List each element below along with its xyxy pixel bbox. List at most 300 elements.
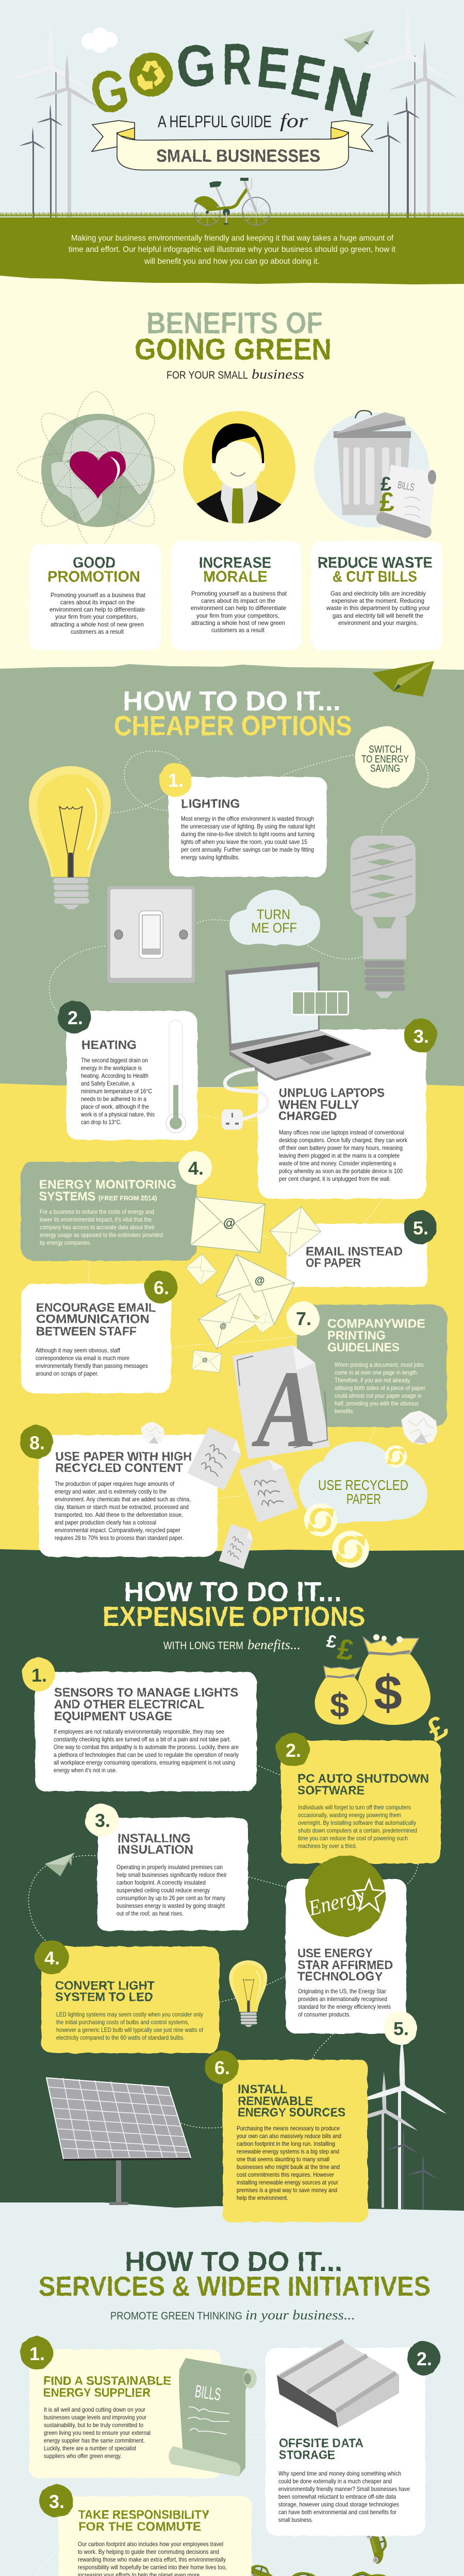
text: renewable energy systems is a big step and: [237, 2148, 339, 2155]
number 2: [58, 1001, 91, 1033]
text: cost commitments this requires. However: [237, 2171, 334, 2178]
number 4: 4.: [188, 1158, 204, 1179]
title: ENERGY SOURCES: [238, 2106, 345, 2120]
text: customers as a result: [211, 626, 265, 634]
icon: paper plane: [343, 30, 374, 53]
number 5: [404, 1210, 437, 1244]
text: [80, 1057, 155, 1126]
icon: heart: [70, 451, 126, 499]
icon: server block: [277, 2340, 399, 2428]
icon: green cars: [245, 2526, 392, 2576]
callout: switch to energy saving: SWITCH: [369, 744, 402, 755]
number 4: [179, 1151, 212, 1185]
heading: how to do it services and wider initiatives: [39, 2246, 430, 2302]
title: GUIDELINES: [327, 1341, 400, 1354]
number 3: [404, 1019, 437, 1053]
title: OFFSITE DATA: [279, 2436, 363, 2450]
subtitle: a helpful guide for: A HELPFUL GUIDE: [158, 112, 272, 131]
callout: use recycled paper: PAPER: [346, 1491, 381, 1507]
text: [326, 590, 430, 626]
icon: recycle symbols: [304, 1445, 407, 1568]
text: desktop computers. Once fully charged, they can work: [279, 1137, 408, 1144]
text: Therefore, if you are not already,: [335, 1377, 411, 1384]
icon: bills scroll: [169, 2358, 257, 2477]
title: go green: E: [254, 34, 292, 103]
icon: cable and plug: [222, 1069, 268, 1130]
text: expensive at the moment. Reducing: [332, 597, 424, 604]
text: environment can help to differentiate: [191, 604, 286, 612]
text: all workplace energy consuming operations, ensuring equipment is not using: [54, 1759, 235, 1766]
illustration: smiling businessman: [183, 411, 295, 529]
icon: small light bulb: [229, 1960, 267, 2027]
title: SOFTWARE: [297, 1784, 364, 1798]
text: help the environment.: [237, 2194, 288, 2201]
text: responsibility will hopefully be carried into their home lives too,: [78, 2564, 227, 2571]
panel: convert light system to led: [35, 1940, 219, 2053]
text: Why spend time and money doing something which: [278, 2470, 401, 2477]
text: and Safety Executive, a: [81, 1080, 135, 1087]
text: It is all well and good cutting down on your: [44, 2406, 145, 2413]
title: [327, 1317, 425, 1354]
connector lines expensive: [28, 1765, 418, 2128]
title: OF PAPER: [306, 1256, 361, 1270]
icon: document with letter A: A: [251, 1347, 317, 1470]
title: COMPANYWIDE: [327, 1317, 425, 1331]
icon: energy star logo: Energy: [306, 1884, 367, 1921]
icon: energy star logo: [305, 1855, 386, 1937]
text: occasionally, wasting energy powering them: [298, 1811, 401, 1819]
text: [44, 2406, 151, 2460]
hero illustration: [0, 7, 464, 284]
title: [55, 1979, 155, 2004]
panel: good promotion: [29, 544, 161, 650]
text: Originating in the US, the Energy Star: [298, 1988, 386, 1995]
text: installing renewable energy sources at your: [237, 2179, 338, 2186]
text: energy and water, and is extremely costly to the: [55, 1488, 167, 1495]
title: TAKE RESPONSIBILITY: [78, 2508, 209, 2522]
title: GOOD: [73, 554, 115, 571]
text: time you can reduce the cost of powering such: [298, 1835, 408, 1842]
text: [55, 1480, 191, 1541]
text: energy usage as opposed to the estimates provided: [40, 1231, 163, 1239]
text: during the nine-to-five stretch to light rooms and turning: [181, 831, 314, 838]
title: [55, 1450, 192, 1475]
text: Individuals will forget to turn off their computers: [298, 1804, 411, 1811]
text: small business.: [278, 2516, 313, 2523]
text: Our carbon footprint also includes how your employees travel: [78, 2540, 223, 2548]
text: your firm from your competitors,: [55, 613, 138, 620]
text: electricity compared to the 60 watts of standard bulbs.: [56, 2034, 185, 2041]
text: lights off when you leave the room, you could save 15: [181, 838, 307, 845]
title: go green: O: [127, 41, 176, 111]
text: environmentally friendly manner? Small businesses have: [278, 2485, 410, 2493]
illustration: bin with bills: £: [380, 473, 391, 495]
text: Purchasing the means necessary to produce: [237, 2125, 340, 2132]
text: one that seems daunting to many small: [237, 2156, 329, 2163]
text: per cent charged, it is unplugged from the wall.: [279, 1175, 391, 1182]
text: the unnecessary use of lighting. By using the natural light: [181, 823, 316, 830]
title: STAR AFFIRMED: [297, 1958, 393, 1972]
heading: how to do it cheaper options: [114, 686, 352, 741]
number 1: [20, 2336, 53, 2369]
callout: use recycled paper: [299, 1442, 427, 1568]
text: [191, 590, 287, 634]
title: FOR THE COMMUTE: [78, 2520, 201, 2534]
callout: turn me off: [229, 890, 320, 946]
text: energy supplier has the same commitment.: [44, 2437, 145, 2444]
text: requires 28 to 70% less to process than standard paper.: [55, 1534, 184, 1541]
subheading: promote green thinking: in your business...: [245, 2308, 355, 2323]
icon: money bags: $: [330, 1686, 349, 1724]
title: INSTALL: [238, 2082, 287, 2096]
callout: turn me off: TURN: [257, 907, 290, 922]
icon: money bags: [314, 1631, 454, 1748]
number 3: 3.: [413, 1026, 429, 1047]
title: ENERGY SUPPLIER: [43, 2386, 151, 2400]
number 1: 1.: [31, 1665, 47, 1686]
panel: unplug laptops: [258, 1019, 437, 1199]
title: [199, 554, 271, 585]
icon: wind turbines right: [361, 7, 458, 217]
text: leaving them plugged in at the mains is a complete: [279, 1152, 400, 1159]
text: constantly checking lights are turned off as a bit of a pain and not take part.: [54, 1736, 231, 1743]
title: [238, 2082, 345, 2120]
heading: how to do it expensive options: EXPENSIVE OPTIONS: [103, 1601, 365, 1632]
text: green living you need to ensure your external: [44, 2429, 151, 2436]
number 5: 5.: [393, 2018, 409, 2039]
text: could almost cut your paper usage in: [335, 1392, 422, 1399]
number 1: [159, 763, 192, 797]
number 6: 6.: [214, 2057, 230, 2078]
heading: how to do it expensive options: HOW TO DO IT...: [124, 1577, 342, 1607]
text: carbon footprint. A correctly insulated: [117, 1879, 206, 1886]
text: lower its environmental impact, it's vital that the: [40, 1216, 152, 1223]
text: businesses usage levels and improving your: [44, 2414, 146, 2421]
text: customers as a result: [71, 628, 124, 635]
text: energy in the workplace is: [81, 1064, 142, 1072]
text: [78, 2540, 227, 2576]
text: Gas and electricity bills are incredibly: [330, 590, 426, 597]
title: [279, 2436, 363, 2462]
number 1: 1.: [168, 770, 184, 791]
text: and paper production clearly has a colossal: [55, 1519, 156, 1526]
title: STORAGE: [279, 2448, 335, 2462]
panel: find a sustainable energy supplier: [20, 2336, 257, 2478]
icon: pound signs: [325, 1631, 454, 1748]
title: [118, 1832, 193, 1857]
text: small businesses: SMALL BUSINESSES: [156, 146, 320, 166]
text: waste in this department by cutting your: [326, 604, 430, 612]
text: businesses energy is wasted by going straight: [117, 1902, 225, 1909]
text: out of the roof, as heat rises.: [117, 1910, 184, 1917]
text: Promoting yourself as a business that: [191, 590, 287, 597]
text: consumption by up to 26 per cent as for many: [117, 1894, 225, 1902]
title: go green: E: [286, 42, 330, 113]
title: go green: [85, 32, 378, 132]
title: INCREASE: [199, 554, 271, 571]
text: suspended ceiling could reduce energy: [117, 1887, 210, 1894]
text: per cent annually. Further savings can be made by fitting: [181, 846, 314, 853]
panel: email instead of paper: [287, 1210, 437, 1287]
icon: light bulb: [29, 766, 111, 909]
callout: turn me off: ME OFF: [251, 920, 297, 936]
text: around on scraps of paper.: [36, 1370, 98, 1377]
subheading: with long term benefits: WITH LONG TERM: [163, 1640, 243, 1652]
title: USE PAPER WITH HIGH: [55, 1450, 192, 1464]
title: [54, 1686, 238, 1723]
text: storage, however using cloud storage technologies: [278, 2501, 399, 2508]
text: cares about its impact on the: [201, 597, 275, 604]
subheading: for your small business: [167, 367, 304, 382]
title: & CUT BILLS: [333, 568, 417, 585]
subheading: promote green thinking: [110, 2308, 355, 2323]
icon: small crumpled paper: [141, 1422, 164, 1445]
connector lines services: [22, 2437, 390, 2576]
text: off their own battery power for many hours, meaning: [279, 1144, 403, 1151]
text: [298, 1988, 391, 2018]
icon: envelopes: @: [223, 1216, 235, 1230]
text: environmentally friendly than passing messages: [36, 1362, 148, 1369]
title: WHEN FULLY: [278, 1098, 359, 1112]
callout: use recycled paper: USE RECYCLED: [318, 1477, 408, 1493]
text: rewarding those who make an extra effort, this environmentally: [78, 2556, 226, 2563]
heading: benefits of going green: BENEFITS OF: [146, 307, 323, 340]
illustration: bin with bills: [314, 411, 436, 537]
subheading: with long term benefits: [163, 1637, 301, 1652]
title: HEATING: [81, 1038, 137, 1052]
title: PRINTING: [327, 1329, 386, 1343]
text: needs to be adhered to in a: [81, 1095, 146, 1103]
title: RECYCLED CONTENT: [55, 1461, 183, 1475]
text: can have both environmental and cost benefits for: [278, 2509, 396, 2516]
number 5: [384, 2011, 417, 2045]
icon: money bags: $: [374, 1666, 402, 1720]
title: PC AUTO SHUTDOWN: [297, 1772, 429, 1786]
panel: increase morale: [171, 541, 302, 650]
title: REDUCE WASTE: [318, 554, 433, 571]
text: Operating in properly insulated premises can: [117, 1863, 223, 1871]
title: EMAIL INSTEAD: [306, 1245, 403, 1259]
text: minimum temperature of 16°C: [81, 1088, 152, 1095]
text: your own can also massively reduce bills and: [237, 2132, 341, 2140]
icon: pound signs: £: [325, 1631, 338, 1652]
text: provides an internationally recognised: [298, 1995, 387, 2003]
number 1: [22, 1657, 55, 1691]
title: INSTALLING: [118, 1832, 191, 1845]
callout: switch to energy saving: TO ENERGY: [361, 754, 409, 765]
title: [297, 1946, 393, 1984]
text: to work. By helping to guide their commuting decisions and: [78, 2548, 219, 2555]
text: environment. Any chemicals that are added such as china,: [55, 1496, 191, 1503]
number 3: [39, 2484, 73, 2517]
text: waste of time and money. Consider implementing a: [278, 1160, 396, 1167]
panel: companywide printing guidelines: [287, 1301, 447, 1427]
text: however a generic LED bulb will typically use just nine watts of: [56, 2026, 204, 2033]
icon: crumpled paper: [401, 1411, 437, 1445]
background: cheaper options yellow: [0, 1083, 464, 1556]
title: LIGHTING: [181, 797, 240, 811]
subheading: with long term benefits: benefits...: [247, 1637, 301, 1652]
title: go green: G: [174, 32, 219, 100]
icon: bicycles: [21, 2575, 256, 2576]
title: MORALE: [203, 568, 268, 585]
text: environment can help to differentiate: [49, 606, 145, 613]
text: Luckily, there are a number of specialist: [44, 2445, 137, 2452]
text: a plethora of technologies that can be used to regulate the operation of nearly: [54, 1751, 239, 1758]
intro text: [69, 234, 396, 266]
icon: energy saving bulb: [351, 836, 416, 998]
number 4: [35, 1940, 69, 1974]
text: attracting a whole host of new green: [51, 621, 144, 628]
subtitle: a helpful guide for: for: [280, 110, 308, 132]
text: LED lighting systems may seem costly when you consider only: [56, 2011, 203, 2018]
title: SYSTEM TO LED: [55, 1990, 153, 2004]
icon: laptop: [225, 962, 371, 1081]
intro text: will benefit you and how you can go about doing it.: [144, 257, 320, 266]
text: [36, 1347, 148, 1377]
icon: bills scroll: BILLS: [194, 2382, 222, 2404]
subheading: for your small business: business: [252, 367, 304, 382]
heading: benefits of going green: GOING GREEN: [135, 333, 332, 366]
panel: take responsibility for the commute: [39, 2484, 252, 2576]
icon: light switch: [107, 886, 195, 983]
text: work is of a physical nature, this: [80, 1111, 155, 1118]
icon: wind turbines left: [7, 22, 98, 217]
connector lines: [49, 751, 428, 1499]
text: [54, 1728, 239, 1774]
text: correspondence via email is much more: [36, 1354, 129, 1362]
number 3: 3.: [49, 2491, 64, 2512]
text: company has access to accurate data about their: [40, 1224, 155, 1231]
text: [278, 1129, 408, 1182]
text: Many offices now use laptops instead of conventional: [279, 1129, 404, 1136]
number 6: [144, 1270, 177, 1303]
text: half, providing you with the obvious: [335, 1400, 419, 1407]
title: go green: N: [318, 52, 378, 132]
text: can drop to 13°C.: [81, 1118, 122, 1126]
text: environmental impact. Comparatively, recycled paper: [55, 1527, 180, 1534]
background: cheaper options sage: [0, 664, 464, 1087]
text: gas and electrity bill will benefit the: [333, 612, 423, 619]
ribbon banner: [92, 121, 373, 170]
panel: offsite data storage: [266, 2340, 440, 2536]
text: come in at over one page in length.: [335, 1369, 418, 1376]
heading: how to do it services and wider initiatives: HOW TO DO IT...: [125, 2246, 342, 2277]
text: help small businesses significantly reduce their: [117, 1871, 227, 1878]
text: If employees are not naturally environmentally responsible, they may see: [54, 1728, 224, 1735]
callout: switch to energy saving: [355, 726, 416, 788]
icon: envelopes: [186, 1197, 321, 1372]
text: shuts down computers at a certain, predetermined: [298, 1827, 417, 1834]
text: Most energy in the office environment is wasted through: [181, 815, 314, 822]
subheading: promote green thinking: PROMOTE GREEN THINKING: [110, 2310, 242, 2322]
background: services pale: [0, 2202, 464, 2576]
number 6: [205, 2050, 239, 2083]
icon: bicycle: [194, 178, 270, 225]
icon: olive paper plane: [372, 661, 434, 697]
text: suppliers who offer green energy.: [44, 2452, 122, 2460]
title: ENERGY MONITORING: [39, 1178, 176, 1192]
text: The second biggest drain on: [81, 1057, 148, 1064]
text: could be done externally in a much cheaper and: [278, 2478, 392, 2485]
title: COMMUNICATION: [36, 1312, 150, 1326]
text: overnight. By installing software that automatically: [298, 1819, 416, 1826]
text: energy saving lightbulbs.: [181, 854, 240, 861]
text: For a business to reduce the costs of energy and: [40, 1208, 154, 1215]
icon: wind turbines expensive section: [347, 2036, 448, 2209]
title: [43, 2374, 171, 2400]
text: benefits.: [335, 1408, 354, 1415]
text: businesses who might baulk at the time and: [237, 2163, 340, 2171]
title: SYSTEMS: [39, 1190, 95, 1204]
icon: thermometer: [166, 1020, 186, 1133]
title: PROMOTION: [47, 568, 140, 585]
title: [36, 1301, 156, 1338]
title: (FREE FROM 2014): [98, 1194, 157, 1202]
text: [40, 1208, 163, 1246]
intro text: Making your business environmentally friendly and keeping it that way takes a huge amount of: [71, 234, 394, 243]
panel: heating: [58, 1001, 197, 1140]
title: [278, 1086, 385, 1123]
text: standard for the energy efficiency levels: [298, 2003, 391, 2010]
icon: loose documents: [187, 1427, 299, 1569]
heading: how to do it expensive options: [103, 1577, 365, 1632]
text: by energy companies.: [40, 1239, 91, 1246]
callout: switch to energy saving: SAVING: [370, 763, 400, 774]
icon: cloud: [81, 27, 118, 53]
number 5: 5.: [413, 1217, 428, 1239]
background: benefits cream: [0, 222, 464, 675]
subheading: for your small business: FOR YOUR SMALL: [167, 369, 248, 381]
panel: sensors to manage lights: [22, 1657, 257, 1791]
title: go green: G: [85, 56, 135, 128]
text: The production of paper requires huge amounts of: [55, 1480, 175, 1487]
number 2: 2.: [68, 1007, 83, 1028]
grass band: [0, 212, 464, 284]
title: SENSORS TO MANAGE LIGHTS: [54, 1686, 238, 1700]
text: One way to combat this antipathy is to automate the process. Luckily, there are: [54, 1743, 239, 1751]
title: [306, 1245, 403, 1270]
intro text: time and effort. Our helpful infographic will illustrate why your business should go green, how it: [69, 245, 396, 254]
illustration: solar panel: [46, 2078, 191, 2205]
text: [335, 1361, 425, 1415]
panel: energy monitoring systems: [21, 1151, 212, 1261]
icon: pound signs: £: [336, 1632, 356, 1667]
heading: how to do it services and wider initiatives: SERVICES & WIDER INITIATIVES: [39, 2271, 430, 2302]
icon: envelopes: @: [220, 1321, 227, 1330]
illustration: globe with heart: [17, 392, 175, 548]
title: RENEWABLE: [238, 2094, 313, 2108]
icon: envelopes: @: [202, 1357, 208, 1363]
text: [117, 1863, 227, 1917]
title: CONVERT LIGHT: [55, 1979, 155, 1993]
panel: reduce waste and cut bills: [311, 541, 442, 650]
text: policy whereby as soon as the portable device is 100: [279, 1167, 403, 1175]
title: USE ENERGY: [297, 1946, 373, 1960]
text: [237, 2125, 341, 2201]
text: utilising both sides of a piece of paper: [335, 1384, 425, 1392]
text: place of work, although if the: [81, 1103, 149, 1110]
title: EQUIPMENT USAGE: [54, 1709, 172, 1723]
title: AND OTHER ELECTRICAL: [54, 1698, 204, 1711]
number 2: [276, 1733, 310, 1767]
text: When printing a document, most jobs: [335, 1361, 424, 1368]
title: CHARGED: [278, 1109, 337, 1123]
text: attracting a whole host of new green: [191, 619, 285, 626]
illustration: bin with bills: £: [379, 487, 394, 517]
text: machines by over a third.: [298, 1842, 357, 1850]
text: sustainability, but to be truly committed to: [44, 2421, 143, 2429]
